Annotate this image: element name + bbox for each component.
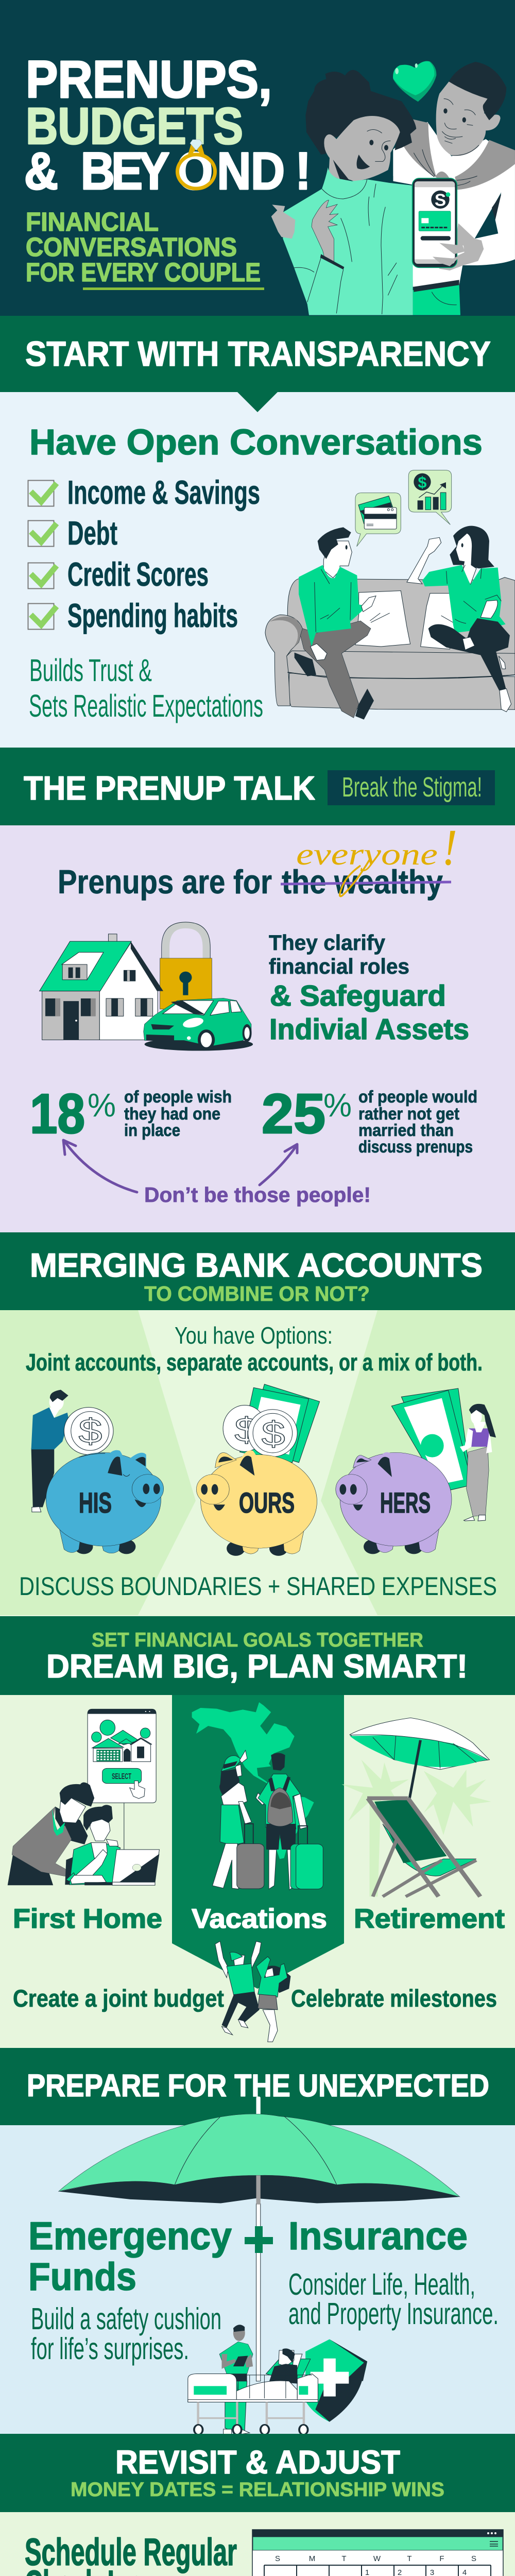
stat: 18 percent: % [88, 1087, 116, 1124]
subtitle: FOR EVERY COUPLE [26, 258, 261, 287]
man with coin [31, 1389, 69, 1512]
coin [64, 1408, 113, 1454]
heading: dream big, plan smart: SET FINANCIAL GOALS TOGETHER [92, 1629, 423, 1651]
banknote [391, 1388, 472, 1492]
chart: calendar: T [407, 2554, 412, 2563]
stat: 25 percent [262, 1082, 477, 1156]
callout: don't be those people: Don’t be those people! [144, 1183, 371, 1207]
labels: goals: Vacations [192, 1904, 327, 1934]
listing house [92, 1720, 152, 1761]
coins [223, 1405, 297, 1457]
stat: 18 percent: they had one [124, 1104, 220, 1123]
speech bubble: growth chart [408, 470, 452, 524]
man's white shirt [393, 122, 515, 287]
woman with banknote [460, 1404, 496, 1521]
checklist: Spending habits [67, 597, 238, 634]
checklist: Credit Scores [67, 555, 209, 593]
nurse [219, 2325, 253, 2434]
illustration: hospital bed, nurse and shield [188, 2325, 367, 2435]
speech bubble: growth chart: $ [418, 474, 426, 492]
stat: 25 percent: married than [358, 1121, 454, 1140]
icon: plus [245, 2226, 273, 2253]
shield [305, 2339, 367, 2422]
label: his: HIS [79, 1486, 112, 1519]
stat: 25 percent: rather not get [358, 1104, 459, 1123]
map: north america [192, 1702, 295, 1787]
heading: start with transparency [0, 316, 515, 392]
panel: prenups are for everyone [0, 819, 515, 1232]
labels: goals: Retirement [354, 1904, 505, 1934]
man traveller [256, 1753, 307, 1890]
illustration: celebrating couple [215, 1941, 290, 2042]
text: builds trust: Sets Realistic Expectations [29, 688, 263, 723]
text: emergency funds: Build a safety cushion [31, 2302, 221, 2336]
heading: prenups are for: the wealthy [282, 863, 443, 901]
title [24, 50, 311, 200]
illustration: retirement beach chair [341, 1718, 491, 1896]
label: hers: HERS [380, 1486, 431, 1519]
text: you have options [26, 1322, 483, 1376]
car [144, 998, 253, 1051]
labels: goals [13, 1904, 505, 1934]
man's head [436, 81, 501, 156]
subtitle: FINANCIAL [26, 207, 159, 236]
illustration: his piggy bank [31, 1389, 164, 1554]
panel: emergency funds and insurance [0, 2096, 515, 2435]
stat: 25 percent: discuss prenups [358, 1137, 473, 1156]
palm trees [341, 1760, 491, 1896]
heading: revisit and adjust [0, 2434, 515, 2512]
illustration: umbrella [59, 2096, 460, 2381]
patient and bed [188, 2348, 318, 2435]
handwritten: everyone: everyone [296, 837, 438, 871]
map: south america [277, 1797, 314, 1859]
heading: the prenup talk: THE PRENUP TALK [24, 769, 315, 807]
stat: 18 percent: of people wish [124, 1087, 232, 1106]
panel: money dates [0, 2512, 515, 2576]
handwritten: everyone [296, 819, 457, 896]
sofa [265, 578, 515, 709]
coin: $ [78, 1412, 102, 1450]
woman jumping [256, 1957, 290, 2042]
heading: prenups are for: Prenups are for [58, 863, 272, 901]
heading: dream big, plan smart [0, 1616, 515, 1695]
chart: calendar: S [275, 2554, 280, 2563]
text: they clarify: financial roles [269, 954, 409, 978]
panel: hero [0, 0, 515, 316]
chart: calendar: S [471, 2554, 476, 2563]
umbrella [350, 1718, 489, 1802]
text: emergency funds [28, 2214, 232, 2366]
woman's face [324, 116, 400, 181]
select button [102, 1768, 141, 1784]
text: they clarify: & Safeguard [270, 979, 446, 1012]
heading: prepare for the unexpected [0, 2048, 515, 2125]
subtitle [26, 207, 264, 290]
text: they clarify: They clarify [269, 930, 386, 955]
stat: 25 percent: of people would [358, 1087, 477, 1106]
text: emergency funds: for life’s surprises. [31, 2332, 189, 2366]
text: insurance [288, 2214, 499, 2331]
woman's hand [312, 200, 338, 264]
laptop [84, 1850, 159, 1885]
heading: have open conversations: Have Open Conversations [29, 422, 483, 462]
text: emergency funds: Emergency [28, 2214, 232, 2258]
heading: merging bank accounts: TO COMBINE OR NOT? [144, 1282, 370, 1306]
chart: calendar: W [373, 2554, 381, 2563]
woman's mint sweater [283, 167, 413, 315]
man on sofa [295, 527, 376, 720]
house [40, 934, 163, 1040]
stat: 18 percent: 18 [30, 1082, 85, 1145]
man's trousers [413, 285, 460, 315]
illustration: ours piggy bank [196, 1384, 320, 1556]
label: ours: OURS [239, 1486, 295, 1519]
text: schedule regular check-ins [25, 2531, 237, 2576]
woman on sofa [407, 526, 511, 712]
phone: S [435, 191, 446, 210]
subtitle: CONVERSATIONS [26, 232, 237, 262]
chart: calendar: T [341, 2554, 347, 2563]
text: builds trust: Builds Trust & [29, 653, 152, 688]
stat: 18 percent: in place [124, 1121, 180, 1140]
stat: 25 percent: % [323, 1087, 352, 1124]
label: select button: SELECT [112, 1772, 131, 1781]
arrow: right [260, 1144, 297, 1185]
title: PRENUPS, [26, 50, 272, 109]
illustration: couple looking at phone [271, 61, 515, 315]
chart: calendar: F [439, 2554, 444, 2563]
text: emergency funds: Funds [28, 2255, 136, 2299]
coins: $ [262, 1415, 285, 1453]
title: & BEYOND! [24, 141, 311, 200]
woman [65, 1805, 121, 1885]
heading: dream big, plan smart: DREAM BIG, PLAN SMART! [46, 1648, 468, 1685]
icon: heart [393, 61, 436, 101]
man's grey scarf [403, 118, 436, 177]
checklist: Income & Savings [67, 473, 260, 511]
heading: merging bank accounts: MERGING BANK ACCOUNTS [30, 1246, 483, 1284]
pointing hand [130, 1781, 145, 1799]
checklist: Debt [67, 514, 117, 552]
phone [413, 178, 465, 267]
browser window [88, 1709, 156, 1803]
text: they clarify: Indivial Assets [269, 1013, 469, 1046]
illustration: vacation couple and map [192, 1702, 323, 1890]
man jumping [215, 1941, 261, 2035]
illustration: couple on sofa [265, 470, 515, 720]
panel: his, ours, hers accounts [0, 1310, 515, 1616]
text: they clarify [269, 930, 469, 1046]
checklist [28, 473, 260, 634]
labels: goals: First Home [13, 1904, 162, 1934]
heading: revisit and adjust: REVISIT & ADJUST [115, 2444, 400, 2481]
coins: $ [234, 1411, 258, 1449]
text: create a joint budget: Create a joint budget [13, 1985, 224, 2012]
illustration: hers piggy bank [336, 1388, 496, 1554]
text: you have options: You have Options: [175, 1322, 333, 1349]
man [8, 1783, 94, 1885]
pillows [355, 591, 455, 649]
icon: diamond ring [177, 140, 215, 189]
suitcase: green [290, 1826, 323, 1889]
illustration: house, lock and car [40, 922, 253, 1051]
panel: have open conversations [0, 392, 515, 748]
man's hand on shoulder [271, 205, 295, 239]
illustration: first home [8, 1709, 159, 1885]
stat: 18 percent [30, 1082, 232, 1145]
panel: financial goals [0, 1695, 515, 2048]
chart: calendar: M [309, 2554, 315, 2563]
arrow: left [63, 1140, 137, 1192]
text: insurance: Insurance [288, 2214, 468, 2258]
lock [160, 922, 212, 1009]
heading: merging bank accounts [0, 1232, 515, 1310]
banknotes [240, 1384, 320, 1463]
speech bubble: credit cards [355, 493, 401, 547]
heading: the prenup talk [0, 748, 515, 825]
beach chair [367, 1798, 480, 1896]
woman's hair [305, 70, 416, 155]
suitcase: grey [237, 1824, 264, 1889]
man's hand holding phone [433, 223, 484, 270]
stat: 25 percent: 25 [262, 1082, 325, 1145]
heading: revisit and adjust: MONEY DATES = RELATIONSHIP WINS [71, 2479, 444, 2501]
woman traveller [213, 1750, 251, 1889]
text: builds trust [29, 653, 263, 723]
handwritten: everyone: ! [442, 819, 457, 876]
text: schedule regular check-ins: Schedule Regular [25, 2531, 237, 2573]
title: BUDGETS [26, 97, 243, 155]
chart: calendar [252, 2530, 503, 2576]
heading: prenups are for [58, 863, 451, 901]
